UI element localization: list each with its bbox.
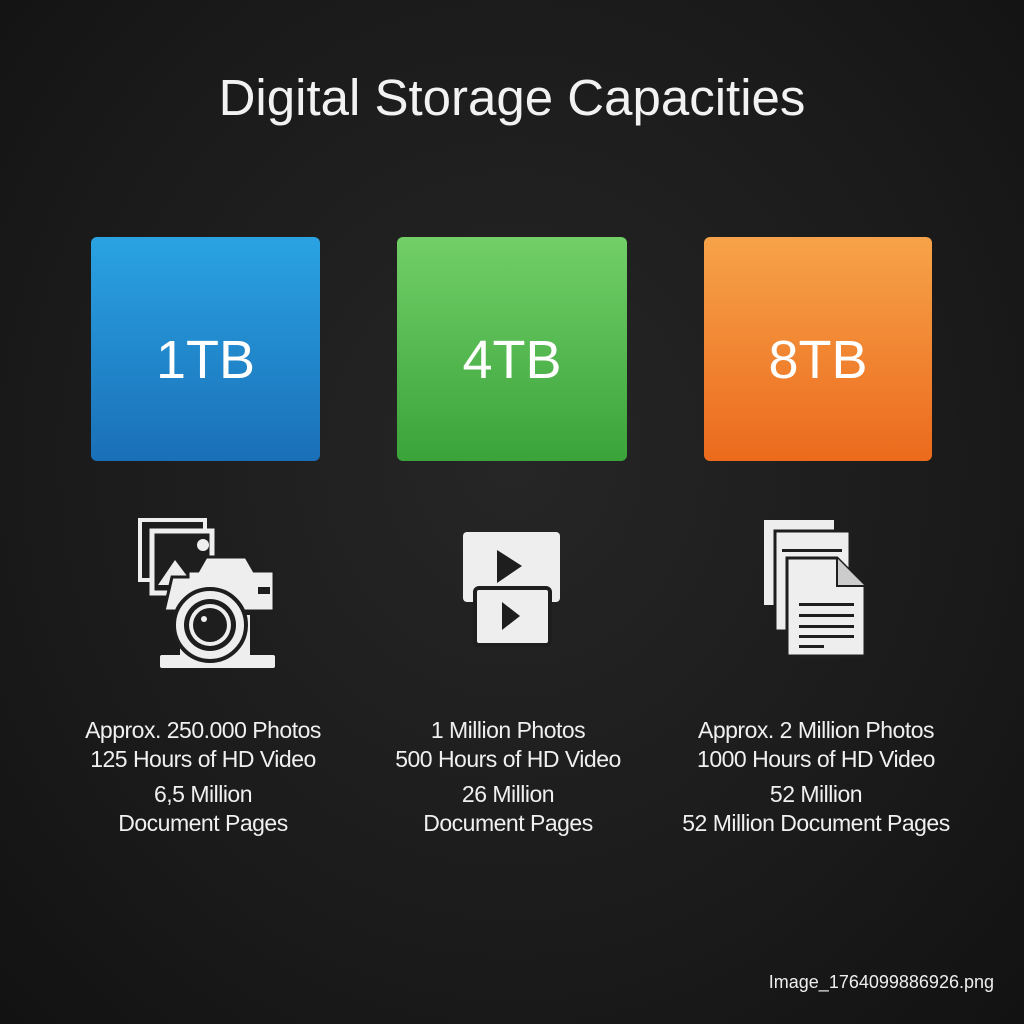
text: 4TB details: 500 Hours of HD Video <box>395 746 621 772</box>
footer filename: Image_1764099886926.png <box>769 972 994 992</box>
text: 8TB details: 1000 Hours of HD Video <box>697 746 935 772</box>
text: 8TB details: 52 Million <box>770 781 862 807</box>
icon: documents <box>764 520 864 654</box>
panel: 4TB <box>397 237 627 461</box>
text: 1TB details: Document Pages <box>118 810 288 836</box>
panel: 1TB <box>91 237 320 461</box>
panel: 1TB: 1TB <box>156 330 255 390</box>
panel: 8TB <box>704 237 932 461</box>
text: 1TB details <box>85 717 321 836</box>
panel: 8TB: 8TB <box>768 330 868 390</box>
text: 4TB details: Document Pages <box>423 810 593 836</box>
text: 8TB details: 52 Million Document Pages <box>682 810 950 836</box>
text: 4TB details: 26 Million <box>462 781 554 807</box>
text: 8TB details <box>682 717 950 836</box>
panel: 4TB: 4TB <box>462 330 562 390</box>
title: Digital Storage Capacities <box>219 69 805 126</box>
text: 1TB details: 125 Hours of HD Video <box>90 746 316 772</box>
text: 4TB details <box>395 717 621 836</box>
text: 1TB details: Approx. 250.000 Photos <box>85 717 321 743</box>
text: 4TB details: 1 Million Photos <box>431 717 585 743</box>
text: 1TB details: 6,5 Million <box>154 781 252 807</box>
icon: camera with photos <box>138 518 275 668</box>
text: 8TB details: Approx. 2 Million Photos <box>698 717 934 743</box>
icon: video <box>463 532 560 643</box>
